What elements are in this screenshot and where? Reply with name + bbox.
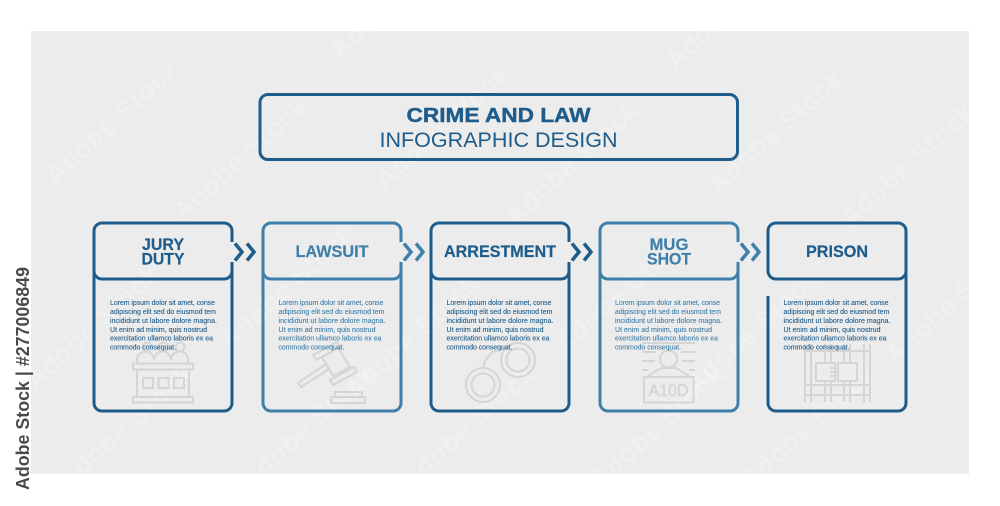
card: prison xyxy=(768,223,906,411)
body text: incididunt ut labore dolore magna. xyxy=(784,318,891,325)
body text: exercitation ullamco laboris ex ea xyxy=(110,336,213,342)
text: Adobe Stock xyxy=(214,218,360,354)
body text: Ut enim ad minim, quis nostrud xyxy=(446,327,544,334)
heading: arrestment: ARRESTMENT xyxy=(444,243,556,261)
body text: incididunt ut labore dolore magna. xyxy=(615,318,722,325)
heading: jury duty: JURY xyxy=(142,236,184,254)
text: Adobe Stock xyxy=(52,358,198,494)
text: Adobe Stock xyxy=(339,268,485,404)
body text: incididunt ut labore dolore magna. xyxy=(278,318,386,325)
heading: mug shot: SHOT xyxy=(647,250,691,268)
icon: mug shot xyxy=(642,343,695,402)
icon label: a10d: A10D xyxy=(648,381,688,400)
subtitle: infographic design: INFOGRAPHIC DESIGN xyxy=(380,129,618,152)
body text: incididunt ut labore dolore magna. xyxy=(446,318,554,325)
body text: adipiscing elit sed do eiusmod tem xyxy=(110,309,216,316)
body text: commodo consequat. xyxy=(110,344,176,352)
body text: commodo consequat. xyxy=(784,344,850,352)
arrow xyxy=(741,244,759,260)
text: Adobe Stock xyxy=(679,263,825,399)
body text: incididunt ut labore dolore magna. xyxy=(110,318,217,325)
body text: commodo consequat. xyxy=(615,344,681,352)
body text: commodo consequat. xyxy=(446,344,513,352)
body text: Ut enim ad minim, quis nostrud xyxy=(615,327,712,334)
body text: Ut enim ad minim, quis nostrud xyxy=(784,327,881,334)
body text: adipiscing elit sed do eiusmod tem xyxy=(446,309,553,316)
arrow xyxy=(572,244,591,260)
heading: mug shot: MUG xyxy=(650,236,688,254)
heading: prison: PRISON xyxy=(806,243,868,261)
body text: exercitation ullamco laboris ex ea xyxy=(784,336,887,342)
body text: adipiscing elit sed do eiusmod tem xyxy=(615,309,721,316)
body text: exercitation ullamco laboris ex ea xyxy=(615,336,718,342)
body text: Lorem ipsum dolor sit amet, conse xyxy=(278,300,384,307)
text: Adobe Stock xyxy=(549,223,695,359)
card: lawsuit xyxy=(263,223,401,411)
body text: adipiscing elit sed do eiusmod tem xyxy=(278,309,385,316)
heading: jury duty: DUTY xyxy=(142,250,184,268)
text: Adobe Stock xyxy=(19,258,165,394)
body text: Ut enim ad minim, quis nostrud xyxy=(110,327,207,334)
body text: exercitation ullamco laboris ex ea xyxy=(278,336,382,342)
arrow xyxy=(404,244,423,260)
icon: handcuffs xyxy=(466,343,535,402)
text: Adobe Stock xyxy=(499,94,645,230)
body text: Lorem ipsum dolor sit amet, conse xyxy=(615,300,720,307)
heading: lawsuit: LAWSUIT xyxy=(296,243,368,261)
icon: gavel xyxy=(298,342,365,403)
text: Adobe Stock xyxy=(584,358,730,494)
body text: Lorem ipsum dolor sit amet, conse xyxy=(784,300,889,307)
text: Adobe Stock xyxy=(734,358,880,494)
icon: prison bars xyxy=(805,344,870,402)
text: Adobe Stock xyxy=(369,58,515,194)
text: Adobe Stock xyxy=(834,96,980,232)
body text: Ut enim ad minim, quis nostrud xyxy=(278,327,376,334)
text: Adobe Stock xyxy=(234,358,380,494)
card: jury duty xyxy=(94,223,232,411)
stock credit: Adobe Stock | #277006849 xyxy=(13,267,33,490)
body text: exercitation ullamco laboris ex ea xyxy=(446,336,550,342)
title: crime and law: CRIME AND LAW xyxy=(406,105,591,127)
body text: Lorem ipsum dolor sit amet, conse xyxy=(110,300,215,307)
icon: jury box xyxy=(133,342,193,402)
text: Adobe Stock xyxy=(702,63,848,199)
title box xyxy=(260,94,738,160)
card: mug shot xyxy=(600,223,738,411)
text: Adobe Stock xyxy=(39,53,185,189)
text: Adobe Stock xyxy=(394,358,540,494)
arrow xyxy=(235,244,254,260)
card: arrestment xyxy=(431,223,569,411)
text: Adobe Stock xyxy=(167,90,313,226)
body text: adipiscing elit sed do eiusmod tem xyxy=(784,309,890,316)
body text: Lorem ipsum dolor sit amet, conse xyxy=(446,300,552,307)
body text: commodo consequat. xyxy=(278,344,345,352)
